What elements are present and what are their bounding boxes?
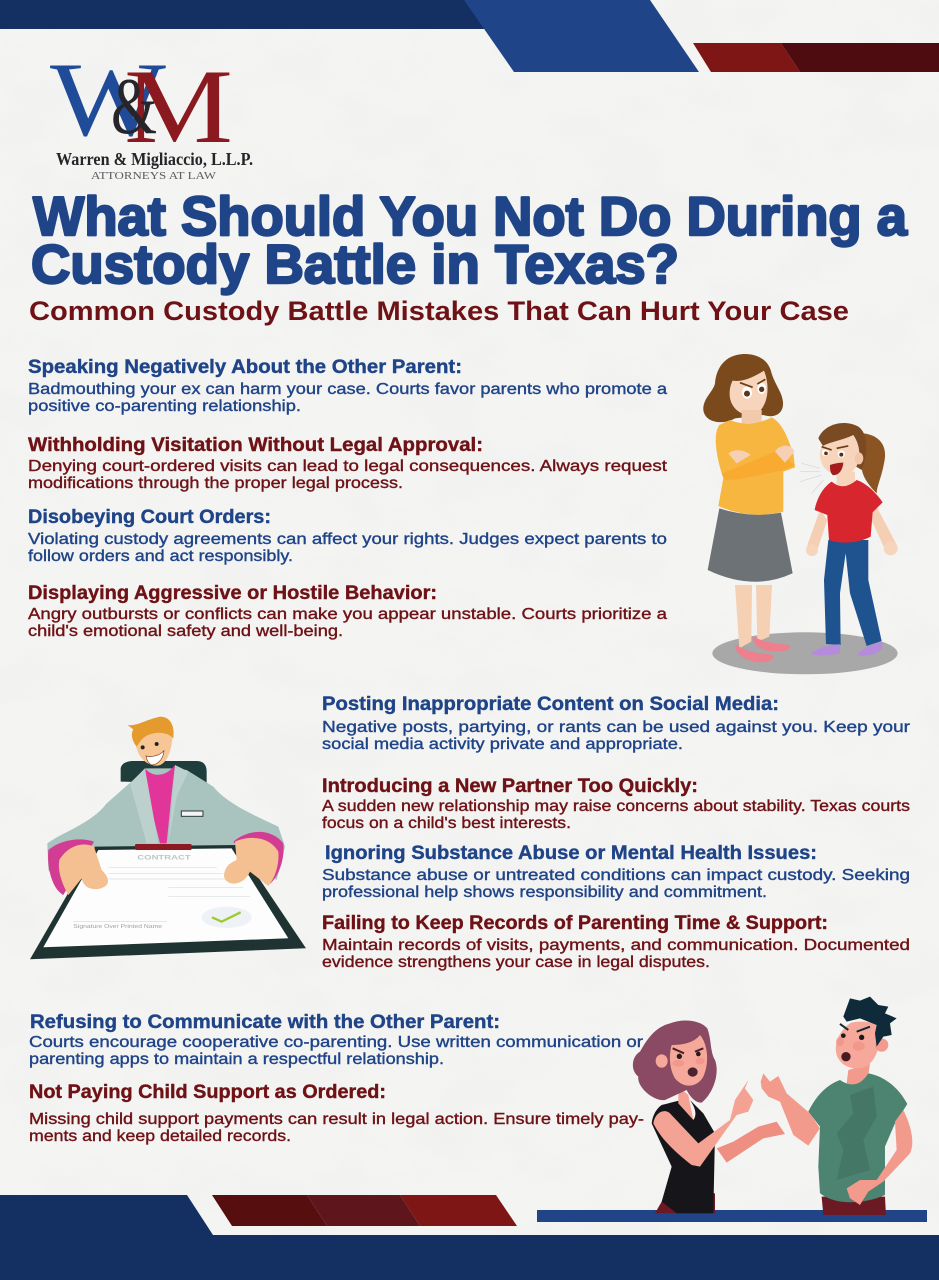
mistake: aggressive behavior: Displaying Aggressive or Hostile Behavior: [28,582,437,604]
mistake: substance abuse: Substance abuse or untreated conditions can impact custody. Seeking [322,867,910,884]
mistake: keeping records: Maintain records of visits, payments, and communication. Documented [322,937,910,954]
mistake: substance abuse: Ignoring Substance Abuse or Mental Health Issues: [325,842,817,864]
mistake: social media [322,693,910,753]
mistake: disobeying court orders: Disobeying Court Orders: [28,506,271,528]
logo: Warren & Migliaccio [50,41,253,182]
mistake: child support: Not Paying Child Support as Ordered: [29,1081,386,1103]
mistake: refusing to communicate [29,1011,643,1068]
mistake: substance abuse [322,842,910,901]
mistake: refusing to communicate: Refusing to Communicate with the Other Parent: [30,1011,500,1033]
mistake: keeping records: evidence strengthens your case in legal disputes. [322,954,710,971]
mistake: withholding visitation: modifications through the proper legal process. [28,475,403,492]
mistake: withholding visitation: Withholding Visitation Without Legal Approval: [28,434,483,456]
mistake: aggressive behavior: child's emotional safety and well-being. [28,623,343,640]
subtitle: Common Custody Battle Mistakes That Can Hurt Your Case [29,296,849,326]
illustration: arguing couple [633,997,912,1215]
mistake: disobeying court orders [28,506,667,565]
logo: Warren & Migliaccio: M [124,48,233,165]
mistake: withholding visitation: Denying court-ordered visits can lead to legal consequences. Always request [28,458,668,475]
mistake: speaking negatively: Speaking Negatively About the Other Parent: [28,356,462,378]
mistake: new partner: Introducing a New Partner Too Quickly: [322,775,698,797]
mistake: social media: Posting Inappropriate Content on Social Media: [322,693,779,715]
mistake: aggressive behavior: Angry outbursts or conflicts can make you appear unstable. Courts prioritize a [28,606,667,623]
logo: Warren & Migliaccio: W [50,41,166,158]
mistake: keeping records [322,912,910,971]
mistake: aggressive behavior [28,582,667,640]
logo: Warren & Migliaccio: & [111,63,157,151]
mistake: speaking negatively: Badmouthing your ex can harm your case. Courts favor parents who promote a [28,381,667,398]
mistake: new partner: focus on a child's best interests. [322,815,571,832]
mistake: speaking negatively [28,356,667,415]
mistake: new partner [322,775,910,832]
mistake: withholding visitation [28,434,668,492]
mistake: social media: social media activity private and appropriate. [322,736,683,753]
mistake: new partner: A sudden new relationship may raise concerns about stability. Texas courts [322,798,910,815]
illustration: lawyer presenting contract [30,717,306,959]
illustration: mother and angry daughter [703,354,898,674]
mistake: child support [29,1081,644,1145]
mistake: disobeying court orders: follow orders and act responsibly. [28,548,293,565]
title: Custody Battle in Texas? [31,233,679,295]
mistake: refusing to communicate: parenting apps to maintain a respectful relationship. [29,1051,444,1068]
mistake: keeping records: Failing to Keep Records of Parenting Time & Support: [322,912,828,934]
illustration: lawyer presenting contract: CONTRACT [137,855,191,861]
mistake: substance abuse: professional help shows responsibility and commitment. [322,884,767,901]
illustration: lawyer presenting contract: Signature Over Printed Name [73,924,162,930]
title: What Should You Not Do During a [33,185,907,247]
logo: Warren & Migliaccio: ATTORNEYS AT LAW [91,171,216,182]
bottom banner [0,1195,939,1280]
mistake: disobeying court orders: Violating custody agreements can affect your rights. Judges expect parents to [28,531,667,548]
top banner [0,0,939,72]
mistake: child support: Missing child support payments can result in legal action. Ensure timely pay- [29,1111,644,1128]
mistake: social media: Negative posts, partying, or rants can be used against you. Keep your [322,719,910,736]
mistake: child support: ments and keep detailed records. [29,1128,291,1145]
logo: Warren & Migliaccio: Warren & Migliaccio, L.L.P. [56,149,253,169]
title [31,185,907,295]
mistake: refusing to communicate: Courts encourage cooperative co-parenting. Use written communication or [29,1034,643,1051]
mistake: speaking negatively: positive co-parenting relationship. [28,398,301,415]
